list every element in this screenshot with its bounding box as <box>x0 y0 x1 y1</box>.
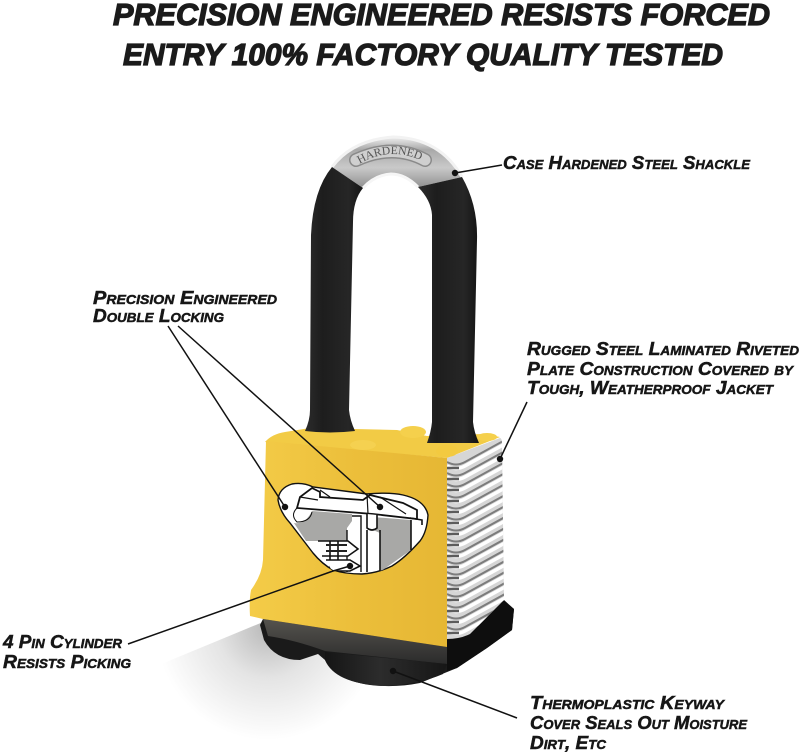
padlock illustration <box>250 136 514 686</box>
callout: double locking <box>93 287 383 510</box>
callout: shackle: Case Hardened Steel Shackle <box>503 152 750 173</box>
callout: jacket: Tough, Weatherproof Jacket <box>527 377 774 398</box>
callout: pin cylinder <box>2 563 353 672</box>
shackle: right sleeve <box>418 177 479 443</box>
title: ENTRY 100% FACTORY QUALITY TESTED <box>123 37 723 72</box>
body: yellow jacket <box>250 440 458 647</box>
callout: jacket: Plate Construction Covered by <box>527 358 794 379</box>
callout: keyway cover: Thermoplastic Keyway <box>530 692 725 713</box>
callout: pin cylinder: 4 Pin Cylinder <box>2 631 123 652</box>
callout: jacket <box>497 338 800 462</box>
body: top face <box>265 426 500 458</box>
title <box>113 0 770 72</box>
callout: double locking: Precision Engineered <box>93 287 278 308</box>
shackle: left sleeve <box>305 167 363 432</box>
callout: keyway cover: Cover Seals Out Moisture <box>530 712 747 733</box>
base: black bottom <box>260 600 514 686</box>
callout: keyway cover <box>390 668 747 753</box>
shackle: steel arc <box>331 136 463 188</box>
callout: keyway cover: Dirt, Etc <box>530 732 607 753</box>
shackle: steel arc: HARDENED <box>356 146 422 164</box>
floor shadow <box>142 622 400 740</box>
body: steel laminations <box>445 436 507 641</box>
callout: jacket: Rugged Steel Laminated Riveted <box>527 338 800 359</box>
cutaway window <box>278 483 428 574</box>
callout: pin cylinder: Resists Picking <box>3 651 131 672</box>
callout: double locking: Double Locking <box>93 305 224 326</box>
